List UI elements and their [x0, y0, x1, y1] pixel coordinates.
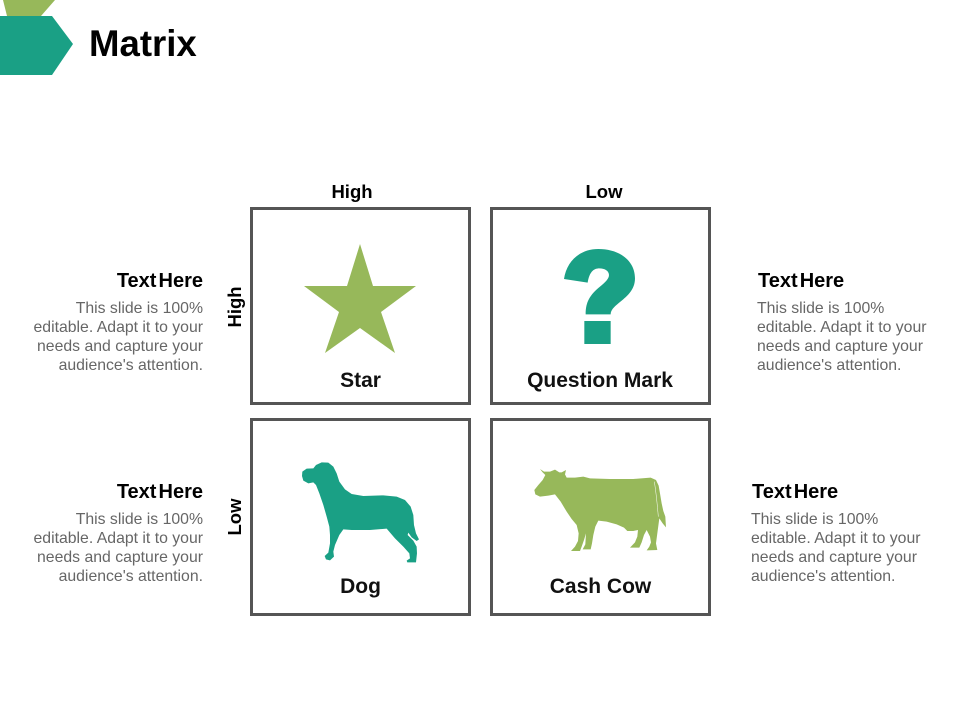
row labels: Low — [224, 498, 245, 536]
label: star: Star — [340, 369, 381, 392]
text block: bottom right: audience's attention. — [751, 568, 895, 585]
text block: bottom left: audience's attention. — [59, 568, 203, 585]
text block: top right: needs and capture your — [757, 338, 923, 355]
panel: star — [252, 208, 470, 404]
text block: bottom left — [34, 481, 203, 585]
label: cash cow: Cash Cow — [550, 575, 652, 598]
text block: top right — [757, 270, 926, 374]
label: question mark: Question Mark — [527, 369, 673, 392]
column labels: High — [331, 181, 373, 202]
text block: top left: editable. Adapt it to your — [34, 319, 203, 336]
text block: top left: Text Here — [117, 270, 203, 292]
column labels: Low — [586, 181, 623, 202]
text block: top right: audience's attention. — [757, 357, 901, 374]
text block: bottom left: Text Here — [117, 481, 203, 503]
title: Matrix — [89, 23, 197, 64]
icon: question mark — [564, 249, 635, 344]
text block: top right: This slide is 100% — [757, 300, 884, 317]
icon: dog — [302, 462, 419, 562]
text block: bottom left: This slide is 100% — [76, 511, 203, 528]
label: dog: Dog — [340, 575, 381, 598]
text block: bottom right: editable. Adapt it to your — [751, 530, 920, 547]
text block: top left: needs and capture your — [37, 338, 203, 355]
text block: bottom left: needs and capture your — [37, 549, 203, 566]
text block: bottom right: This slide is 100% — [751, 511, 878, 528]
text block: bottom right: needs and capture your — [751, 549, 917, 566]
row labels — [224, 286, 245, 536]
header ribbon — [0, 0, 73, 75]
panel: cash cow — [492, 420, 710, 614]
text block: bottom right: Text Here — [752, 481, 838, 503]
row labels: High — [224, 286, 245, 328]
panel: dog — [252, 420, 470, 614]
text block: top right: Text Here — [758, 270, 844, 292]
text block: bottom left: editable. Adapt it to your — [34, 530, 203, 547]
icon: cow — [534, 469, 666, 551]
text block: bottom right — [751, 481, 920, 585]
text block: top left — [34, 270, 203, 374]
text block: top left: audience's attention. — [59, 357, 203, 374]
panel: question mark — [492, 208, 710, 404]
column labels — [331, 181, 623, 202]
icon: star — [304, 244, 416, 353]
text block: top left: This slide is 100% — [76, 300, 203, 317]
text block: top right: editable. Adapt it to your — [757, 319, 926, 336]
